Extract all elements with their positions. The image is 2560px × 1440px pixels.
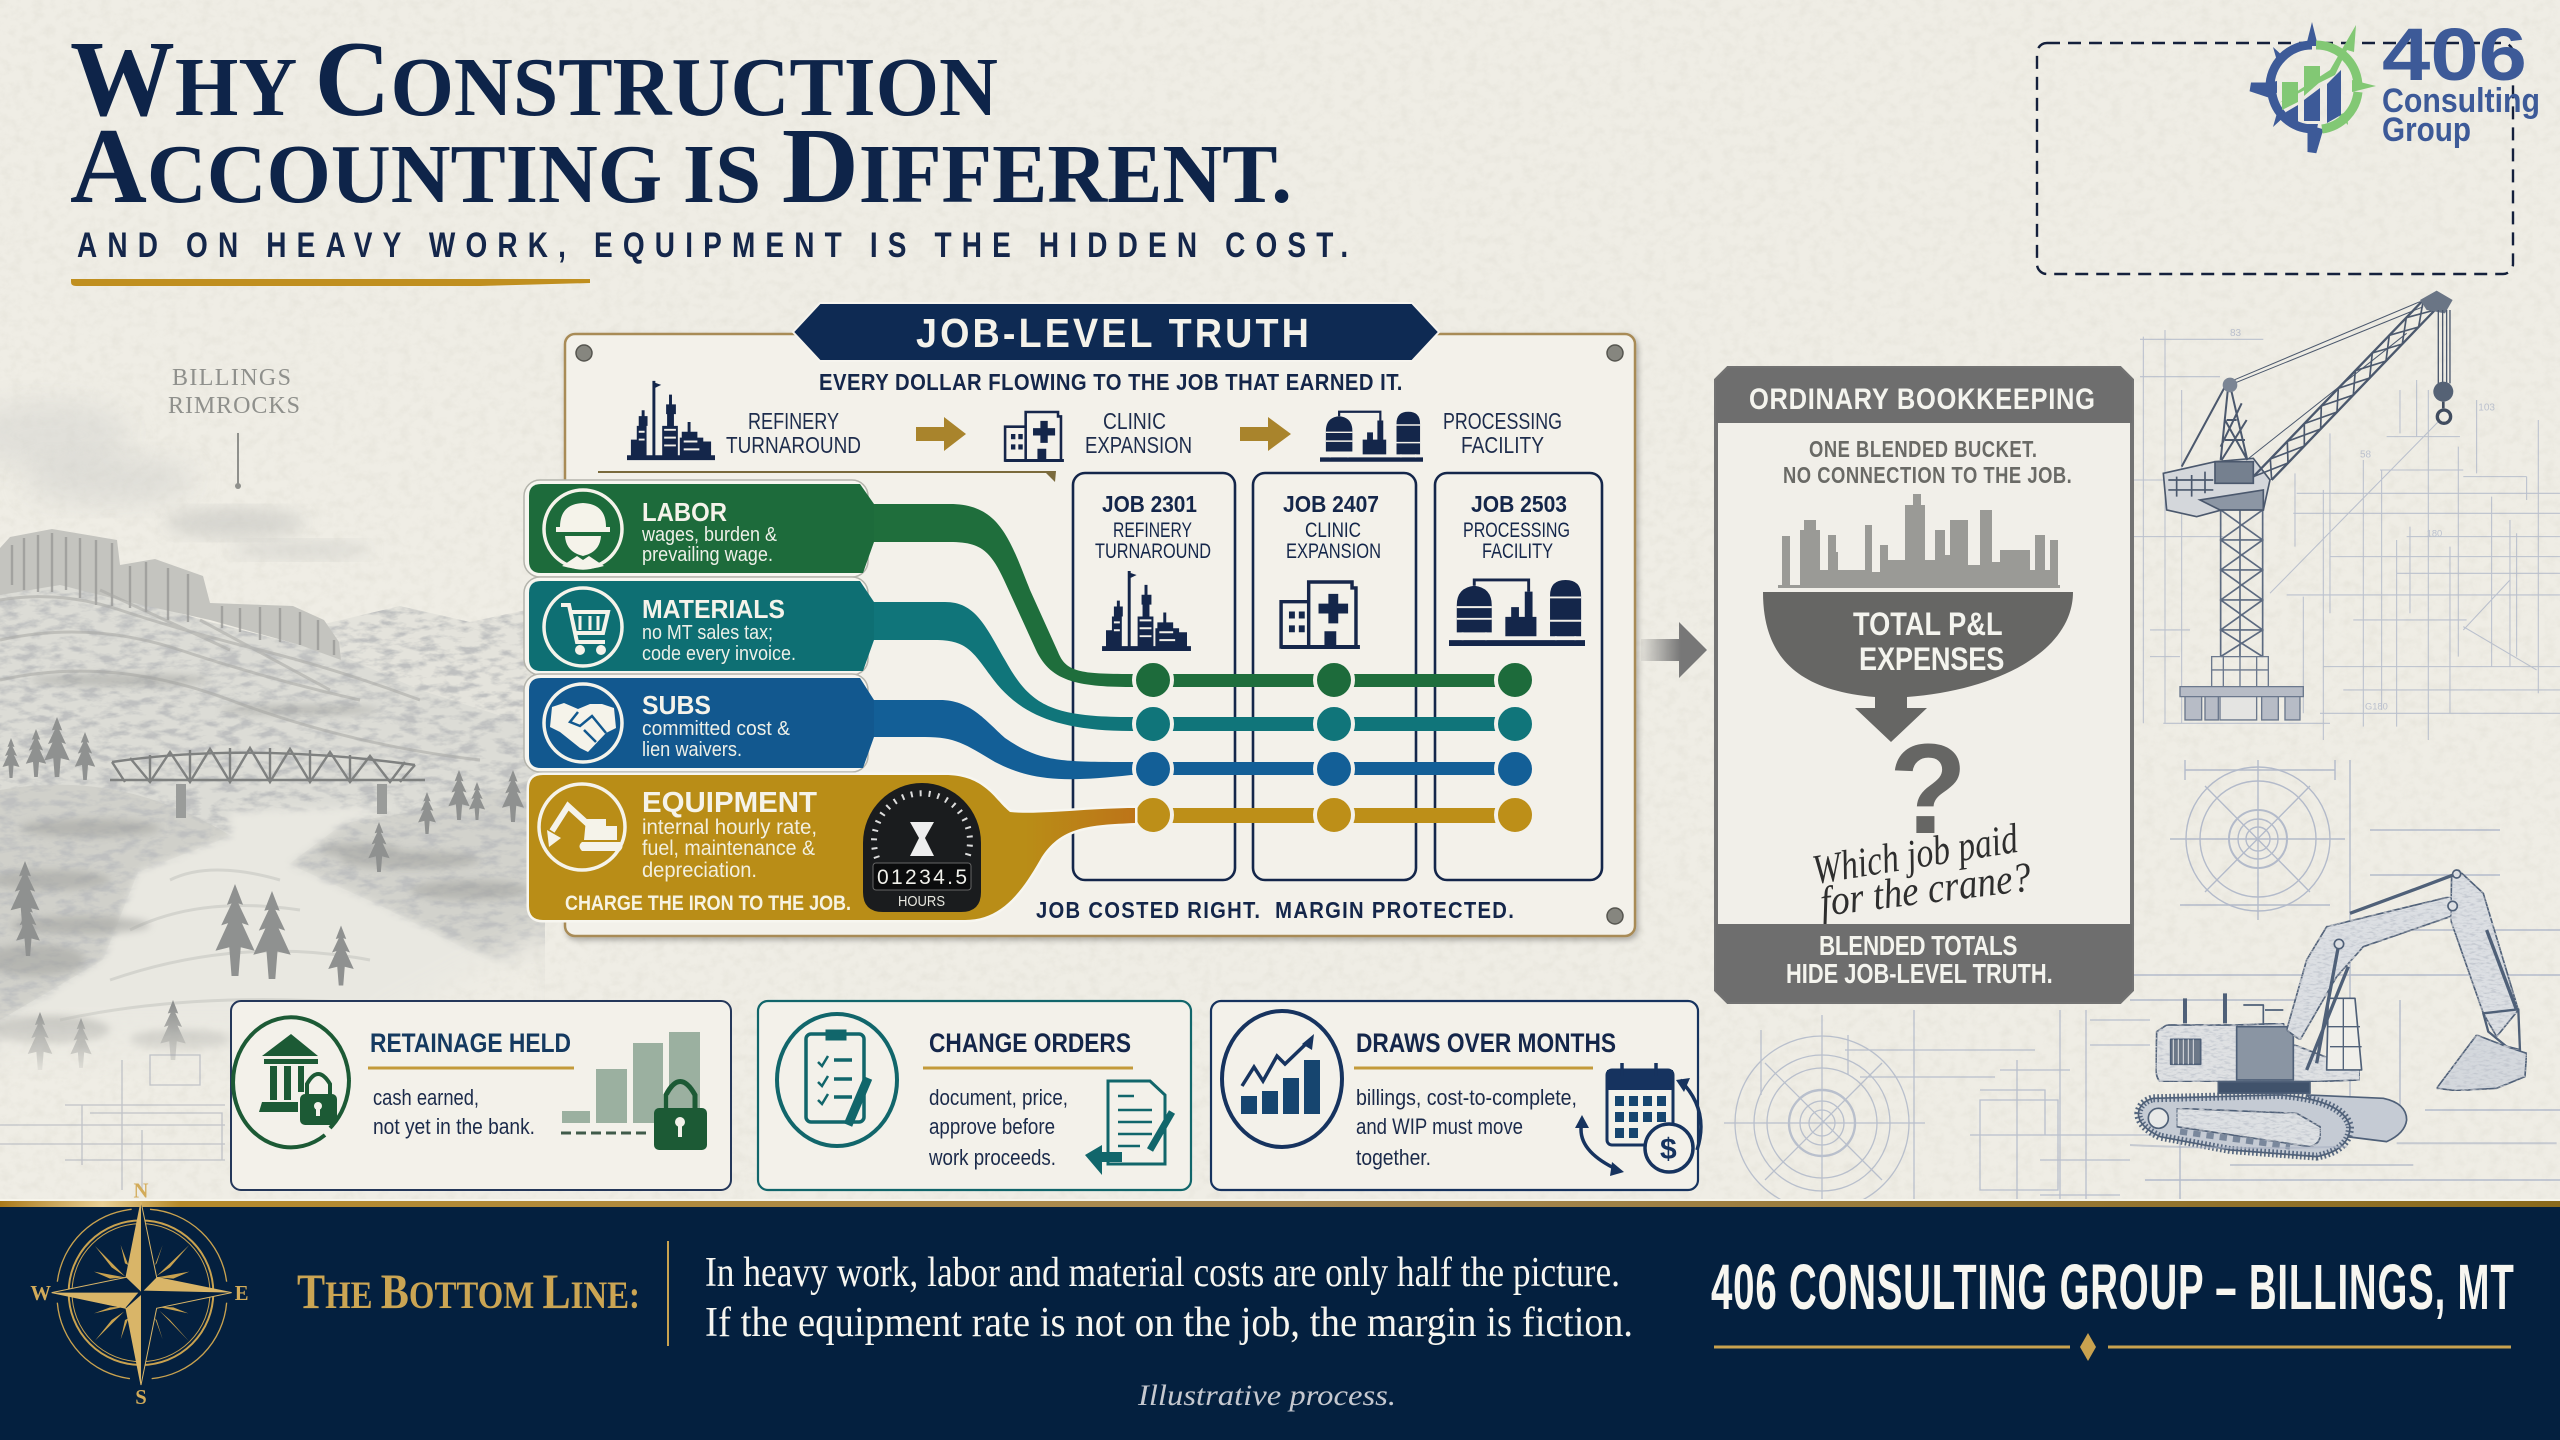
equipment text: fuel, maintenance &: [642, 837, 815, 860]
arrow to ordinary bookkeeping: [1641, 622, 1707, 678]
tower crane sketch: [2163, 291, 2453, 720]
chart: retainage bars with lock: [561, 1032, 707, 1150]
job 2407 labels: CLINIC: [1305, 519, 1361, 542]
retainage text: not yet in the bank.: [373, 1114, 535, 1139]
blueprint linework, upper right: G180: [2365, 701, 2388, 711]
flow dots: [1134, 661, 1534, 834]
change orders text: document, price,: [929, 1085, 1068, 1110]
retainage text: cash earned,: [373, 1085, 479, 1110]
handwritten question: [1809, 816, 2034, 926]
materials text: [642, 622, 796, 665]
label: refinery turnaround: REFINERY: [748, 408, 839, 434]
equipment tagline: CHARGE THE IRON TO THE JOB.: [565, 892, 851, 915]
compass rose: [30, 1180, 249, 1409]
label: processing facility: FACILITY: [1461, 432, 1544, 458]
crane cab: [2163, 458, 2270, 517]
total P&L bucket: [1763, 592, 2073, 742]
bookkeeping footer: [1716, 924, 2132, 1002]
job 2301 labels: JOB 2301: [1102, 491, 1197, 517]
job sequence row: [627, 381, 1562, 462]
dots: subs: [1134, 750, 1534, 788]
job 2301 labels: [1095, 491, 1211, 563]
bookkeeping footer: HIDE JOB-LEVEL TRUTH.: [1786, 958, 2053, 990]
label: clinic expansion: [1085, 408, 1192, 458]
arrow: [916, 417, 966, 451]
banner: job-level truth: JOB-LEVEL TRUTH: [916, 311, 1309, 356]
icon: excavator: [539, 784, 625, 870]
logo: 406 Consulting Group: [2251, 13, 2540, 152]
bucket label: EXPENSES: [1859, 642, 2004, 678]
icon: refinery: [627, 381, 715, 460]
retainage text: [373, 1085, 535, 1139]
label: refinery turnaround: TURNAROUND: [726, 432, 861, 458]
trees: [2, 717, 524, 1070]
bookkeeping footer: BLENDED TOTALS: [1819, 931, 2017, 962]
bucket label: TOTAL P&L: [1853, 607, 2003, 643]
job 2503 labels: FACILITY: [1482, 540, 1553, 563]
subs text: lien waivers.: [642, 739, 742, 761]
blueprint linework, upper right: [2130, 328, 2560, 740]
compass letters: N: [134, 1180, 149, 1202]
crane base: [2180, 657, 2303, 720]
icon: processing facility: [1320, 412, 1423, 462]
category: materials: [524, 577, 874, 675]
job 2407 labels: [1283, 491, 1381, 563]
job 2407 labels: EXPANSION: [1286, 540, 1381, 563]
equipment text: internal hourly rate,: [642, 816, 817, 839]
panel: job-level truth: [524, 303, 1635, 936]
excavator house: [2156, 993, 2362, 1093]
change orders title: CHANGE ORDERS: [929, 1028, 1131, 1058]
compass letters: W: [30, 1283, 51, 1305]
icon: rising chart: [1222, 1011, 1342, 1147]
icon: clipboard: [777, 1014, 897, 1146]
labor text: [641, 524, 778, 566]
equipment text: depreciation.: [642, 859, 757, 882]
logo: 406 Consulting Group: Consulting: [2382, 82, 2540, 120]
gold rule with diamond: [1714, 1333, 2511, 1361]
bottom line statement: In heavy work, labor and material costs are only half the picture.: [705, 1250, 1620, 1296]
shrub bands: [0, 674, 530, 1050]
labor text: prevailing wage.: [642, 544, 773, 566]
footer band: [0, 1199, 2560, 1440]
category: subs: SUBS: [642, 690, 711, 720]
logo placeholder box: [2037, 43, 2513, 274]
draws text: billings, cost-to-complete,: [1356, 1085, 1577, 1110]
crane head, cables and hook: [2223, 291, 2453, 423]
label: clinic expansion: CLINIC: [1103, 408, 1166, 434]
job 2503 labels: JOB 2503: [1471, 491, 1567, 517]
footer divider: [667, 1241, 669, 1346]
panel footer statement: JOB COSTED RIGHT. MARGIN PROTECTED.: [1036, 897, 1514, 923]
job 2503 labels: [1463, 491, 1570, 563]
handwritten question: for the crane?: [1818, 854, 2034, 926]
icon: clinic job 2407: [1281, 582, 1360, 649]
retainage title: RETAINAGE HELD: [370, 1028, 571, 1058]
title: WHY CONSTRUCTION: [70, 20, 998, 139]
draws title: DRAWS OVER MONTHS: [1356, 1028, 1616, 1058]
title: ACCOUNTING IS DIFFERENT.: [70, 107, 1292, 226]
label: processing facility: [1443, 408, 1562, 458]
blueprint linework, upper right: 58: [2360, 449, 2372, 460]
thin row rule with pointer: [598, 471, 1056, 482]
category: subs: [524, 674, 874, 772]
flow: labor: [860, 504, 1500, 687]
subs text: [642, 718, 791, 761]
gold title rule: [71, 279, 590, 286]
left blueprint fragment: [0, 1055, 225, 1190]
bridge piers: [176, 784, 387, 818]
bookkeeping text: ONE BLENDED BUCKET.: [1809, 437, 2037, 463]
icon: handshake: [544, 684, 622, 762]
subs text: committed cost &: [642, 718, 791, 740]
excavator boom and arm: [2287, 870, 2520, 1070]
icon: refinery job 2301: [1102, 571, 1191, 651]
job 2301 labels: REFINERY: [1113, 519, 1192, 542]
change orders text: work proceeds.: [928, 1145, 1056, 1170]
compass rings: [57, 1209, 227, 1379]
excavator sketch: [2130, 870, 2557, 1165]
compass letters: S: [135, 1387, 147, 1409]
card: draws over months: [1211, 1001, 1701, 1190]
category: materials: MATERIALS: [642, 594, 785, 624]
hour meter gauge: 01234.5: [877, 866, 967, 889]
category: labor: [524, 480, 874, 577]
dots: materials: [1134, 705, 1534, 743]
location label: Billings Rimrocks: [168, 365, 300, 489]
bookkeeping text: NO CONNECTION TO THE JOB.: [1783, 463, 2072, 489]
job columns: [1073, 473, 1602, 880]
blueprint drawing: lower wheel and machine: [1724, 1010, 2200, 1210]
category: labor: LABOR: [642, 497, 727, 527]
location label: Billings Rimrocks: BILLINGS: [172, 365, 291, 391]
hour meter gauge: [863, 783, 981, 912]
location label: Billings Rimrocks: RIMROCKS: [168, 393, 300, 419]
job 2301 labels: TURNAROUND: [1095, 540, 1211, 563]
hour meter gauge: HOURS: [898, 893, 945, 910]
card: retainage held: [231, 1001, 731, 1190]
panel: ordinary bookkeeping: [1716, 368, 2132, 1002]
crane mast: [2221, 510, 2263, 657]
icon: clinic: [1005, 412, 1064, 462]
blueprint linework, upper right: 180: [2427, 529, 2442, 539]
compass main star: [52, 1202, 232, 1385]
company signature: 406 CONSULTING GROUP – BILLINGS, MT: [1711, 1252, 2514, 1324]
draws text: and WIP must move: [1356, 1114, 1523, 1139]
bucket label: [1853, 607, 2004, 678]
bottom line statement: [705, 1250, 1633, 1346]
label: clinic expansion: EXPANSION: [1085, 432, 1192, 458]
icon: bank with lock: [233, 1017, 349, 1147]
compass secondary points: [94, 1245, 189, 1342]
icon: document with pen: [1085, 1081, 1172, 1175]
icon: calendar with cycle arrows and coin: [1575, 1063, 1701, 1176]
icon: shopping cart: [544, 588, 622, 666]
bookkeeping header: ORDINARY BOOKKEEPING: [1749, 382, 2095, 415]
rim rock strata: [12, 533, 334, 655]
icon: calendar with cycle arrows and coin: $: [1660, 1133, 1677, 1166]
dots: equipment: [1134, 796, 1534, 834]
excavator tracks: [2138, 1095, 2407, 1157]
bridge: [110, 748, 425, 782]
label: refinery turnaround: [726, 408, 861, 458]
icon: processing job 2503: [1449, 580, 1585, 646]
logo compass mark: [2251, 22, 2376, 152]
bottom line heading: THE BOTTOM LINE:: [297, 1263, 640, 1319]
icon: worker: [544, 490, 622, 569]
question mark: ?: [1889, 718, 1967, 861]
crane A-frame: [2182, 385, 2247, 467]
blueprint linework, upper right: 103: [2478, 403, 2495, 414]
labor text: wages, burden &: [641, 524, 778, 546]
banner: job-level truth: [793, 303, 1439, 361]
dots: labor: [1134, 661, 1534, 699]
logo: 406 Consulting Group: 406: [2382, 13, 2527, 96]
bottom line statement: If the equipment rate is not on the job, the margin is fiction.: [705, 1300, 1633, 1346]
change orders text: approve before: [929, 1114, 1055, 1139]
materials text: no MT sales tax;: [642, 622, 773, 644]
arrow: [1240, 417, 1291, 451]
bookkeeping header: [1716, 368, 2132, 423]
panel subheading: EVERY DOLLAR FLOWING TO THE JOB THAT EARNED IT.: [819, 369, 1402, 395]
disclaimer: Illustrative process.: [1137, 1379, 1396, 1412]
blended skyline: [1778, 494, 2060, 588]
label: processing facility: PROCESSING: [1443, 408, 1562, 434]
draws text: together.: [1356, 1145, 1431, 1170]
card: change orders: [758, 1001, 1191, 1190]
compass star facets: [52, 1202, 232, 1385]
materials text: code every invoice.: [642, 643, 796, 665]
equipment text: [642, 816, 817, 882]
compass letters: [30, 1180, 249, 1409]
category: equipment: [529, 775, 1135, 920]
panel background: [565, 334, 1635, 936]
flow: materials: [860, 602, 1500, 731]
crane jib: [2230, 300, 2435, 480]
logo: 406 Consulting Group: Group: [2382, 111, 2471, 149]
title: [70, 20, 1292, 226]
excavator bucket: [2437, 1035, 2527, 1091]
handwritten question: Which job paid: [1809, 816, 2022, 894]
job 2503 labels: PROCESSING: [1463, 519, 1570, 542]
subtitle: AND ON HEAVY WORK, EQUIPMENT IS THE HIDDEN COST.: [77, 225, 1348, 265]
flow: subs: [860, 700, 1500, 779]
draws text: [1356, 1085, 1577, 1170]
category: equipment: EQUIPMENT: [642, 787, 817, 819]
job 2407 labels: JOB 2407: [1283, 491, 1379, 517]
landscape sketch: Billings Rimrocks: [0, 401, 545, 1080]
blueprint drawing: circular detail: [2130, 760, 2560, 1220]
blueprint linework, upper right: 83: [2230, 328, 2242, 339]
bookkeeping text: [1783, 437, 2072, 489]
rivets: [576, 345, 1623, 924]
compass letters: E: [235, 1283, 249, 1305]
change orders text: [928, 1085, 1068, 1170]
